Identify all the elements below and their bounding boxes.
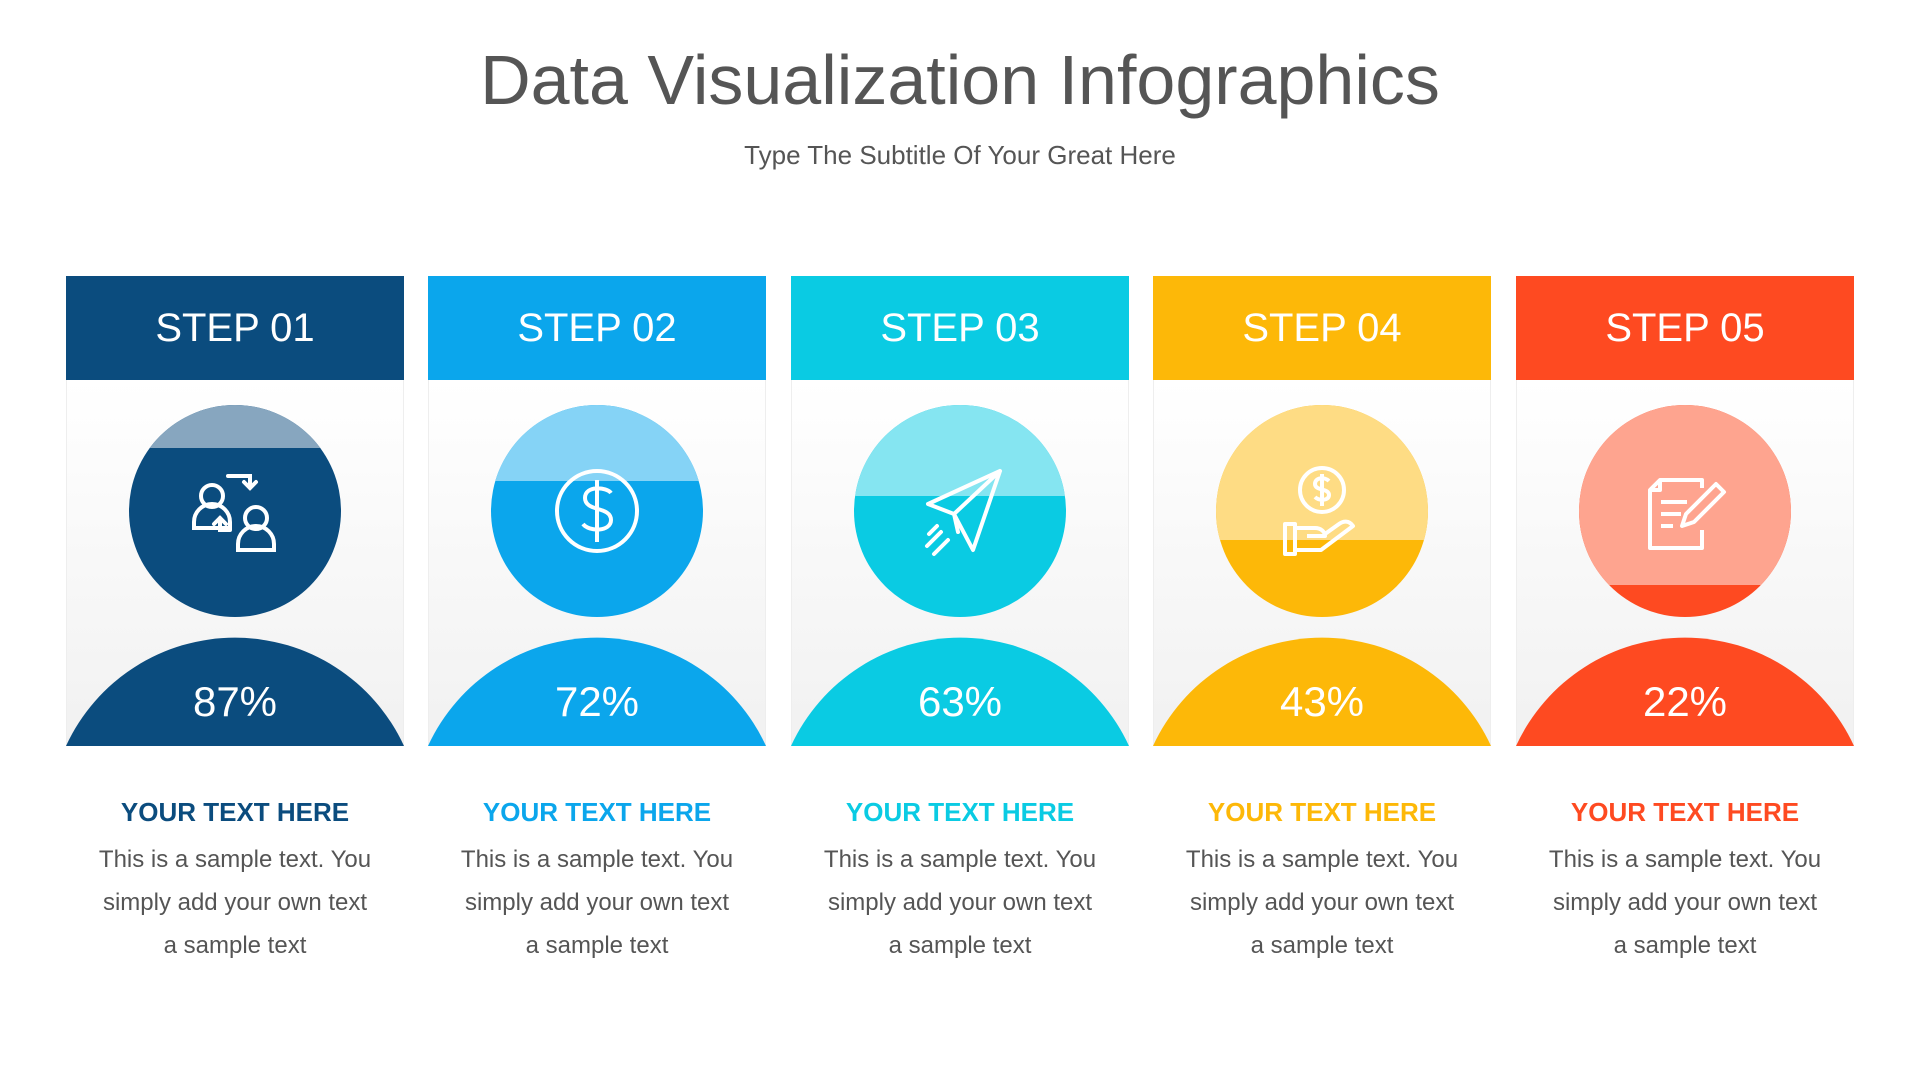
text: a sample text <box>1614 932 1756 959</box>
subtitle: Type The Subtitle Of Your Great Here <box>744 140 1176 170</box>
text: simply add your own text <box>1190 889 1454 916</box>
header step 02 <box>428 276 766 380</box>
text <box>1549 846 1821 959</box>
header step 05 <box>1516 276 1854 380</box>
text: simply add your own text <box>465 889 729 916</box>
text: a sample text <box>889 932 1031 959</box>
header step 01: STEP 01 <box>155 306 315 350</box>
heading: YOUR TEXT HERE <box>1571 797 1799 827</box>
text: simply add your own text <box>1553 889 1817 916</box>
text: This is a sample text. You <box>1549 846 1821 873</box>
chart: step 03 circle and percent <box>791 405 1129 746</box>
text <box>99 846 371 959</box>
panel: step 02 <box>428 276 766 959</box>
text: simply add your own text <box>828 889 1092 916</box>
chart: step 05 circle and percent <box>1516 405 1854 746</box>
text: simply add your own text <box>103 889 367 916</box>
heading: YOUR TEXT HERE <box>121 797 349 827</box>
text: a sample text <box>1251 932 1393 959</box>
header step 05: STEP 05 <box>1605 306 1765 350</box>
heading: YOUR TEXT HERE <box>483 797 711 827</box>
panel: step 01 <box>66 276 404 959</box>
header step 04: STEP 04 <box>1242 306 1402 350</box>
panel: step 04 <box>1153 276 1491 959</box>
header step 04 <box>1153 276 1491 380</box>
chart: step 04 circle and percent: 43% <box>1280 678 1364 725</box>
chart: step 03 circle and percent: 63% <box>918 678 1002 725</box>
chart: step 04 circle and percent <box>1153 405 1491 746</box>
chart: step 01 circle and percent: 87% <box>193 678 277 725</box>
heading: YOUR TEXT HERE <box>1208 797 1436 827</box>
panel: step 05 <box>1516 276 1854 959</box>
text: a sample text <box>164 932 306 959</box>
chart: step 02 circle and percent <box>428 405 766 746</box>
text <box>461 846 733 959</box>
text: This is a sample text. You <box>1186 846 1458 873</box>
heading: YOUR TEXT HERE <box>846 797 1074 827</box>
title: Data Visualization Infographics <box>480 41 1440 119</box>
header step 02: STEP 02 <box>517 306 677 350</box>
header step 03: STEP 03 <box>880 306 1040 350</box>
text: This is a sample text. You <box>824 846 1096 873</box>
panel: step 03 <box>791 276 1129 959</box>
text: a sample text <box>526 932 668 959</box>
header step 01 <box>66 276 404 380</box>
chart: step 05 circle and percent: 22% <box>1643 678 1727 725</box>
text <box>824 846 1096 959</box>
chart: step 02 circle and percent: 72% <box>555 678 639 725</box>
text <box>1186 846 1458 959</box>
text: This is a sample text. You <box>461 846 733 873</box>
chart: step 01 circle and percent <box>66 405 404 746</box>
header step 03 <box>791 276 1129 380</box>
text: This is a sample text. You <box>99 846 371 873</box>
